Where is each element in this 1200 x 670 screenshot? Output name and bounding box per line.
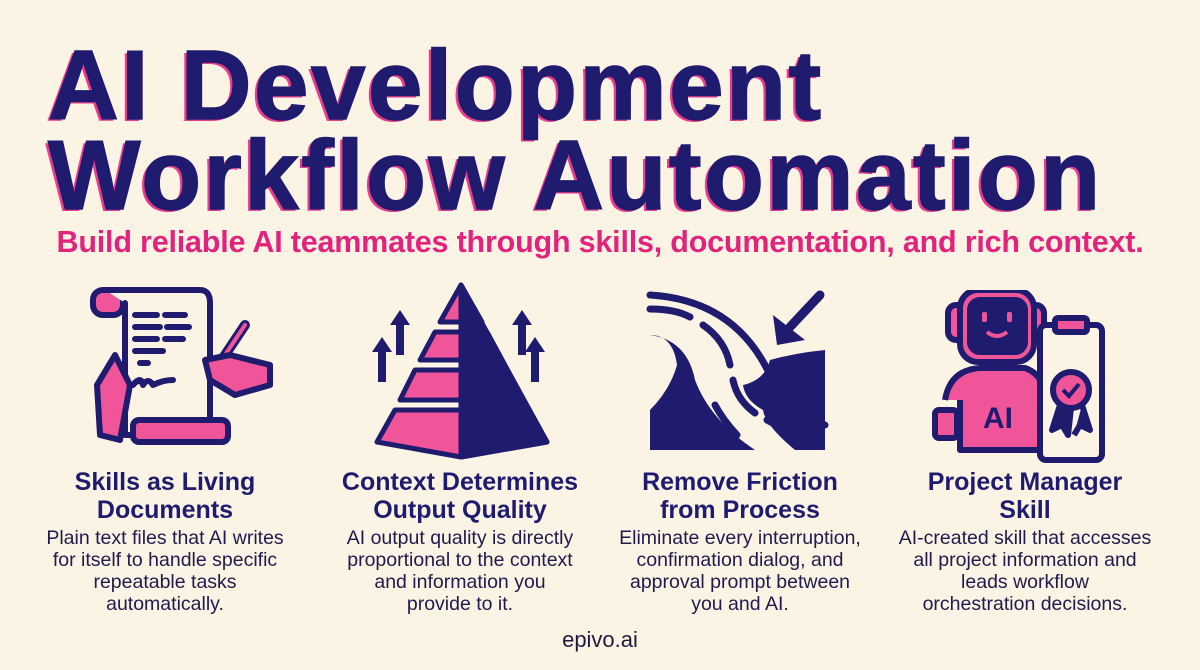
icon: winding road xyxy=(646,290,828,450)
footer: epivo.ai xyxy=(562,627,638,652)
icon: robot with certificate clipboard xyxy=(932,290,1105,463)
column 3 text: Eliminate every interruption, xyxy=(619,527,861,549)
column 4 text: Skill xyxy=(999,496,1051,524)
subtitle: Build reliable AI teammates through skills, documentation, and rich context. xyxy=(57,225,1143,259)
icon: robot with certificate clipboard: AI xyxy=(983,402,1013,435)
column 2 text: Output Quality xyxy=(373,496,547,524)
column 1 text: Plain text files that AI writes xyxy=(46,527,284,549)
title: AI Development xyxy=(48,30,824,140)
column 2 text: provide to it. xyxy=(407,593,513,615)
column 4 text xyxy=(898,468,1151,615)
column 4 text: orchestration decisions. xyxy=(923,593,1127,615)
column 3 text xyxy=(619,468,861,615)
column 3 text: approval prompt between xyxy=(630,571,850,593)
column 4 text: AI-created skill that accesses xyxy=(899,527,1151,549)
title: Workflow Automation xyxy=(48,120,1103,230)
column 1 text: Skills as Living xyxy=(75,468,255,496)
column 2 text: AI output quality is directly xyxy=(347,527,573,549)
column 1 text: repeatable tasks xyxy=(93,571,237,593)
column 3 text: confirmation dialog, and xyxy=(636,549,844,571)
column 2 text: proportional to the context xyxy=(347,549,573,571)
column 1 text: automatically. xyxy=(106,593,224,615)
column 4 text: leads workflow xyxy=(961,571,1089,593)
title xyxy=(45,30,1103,230)
icon: pyramid with arrows xyxy=(372,282,550,460)
column 2 text: and information you xyxy=(374,571,546,593)
column 3 text: Remove Friction xyxy=(642,468,838,496)
column 1 text xyxy=(46,468,284,615)
column 4 text: Project Manager xyxy=(928,468,1122,496)
column 3 text: you and AI. xyxy=(691,593,789,615)
column 2 text xyxy=(342,468,578,615)
column 4 text: all project information and xyxy=(913,549,1137,571)
column 2 text: Context Determines xyxy=(342,468,578,496)
column 1 text: for itself to handle specific xyxy=(53,549,277,571)
column 3 text: from Process xyxy=(660,496,820,524)
icon: scroll with hand writing xyxy=(90,287,273,445)
column 1 text: Documents xyxy=(97,496,233,524)
